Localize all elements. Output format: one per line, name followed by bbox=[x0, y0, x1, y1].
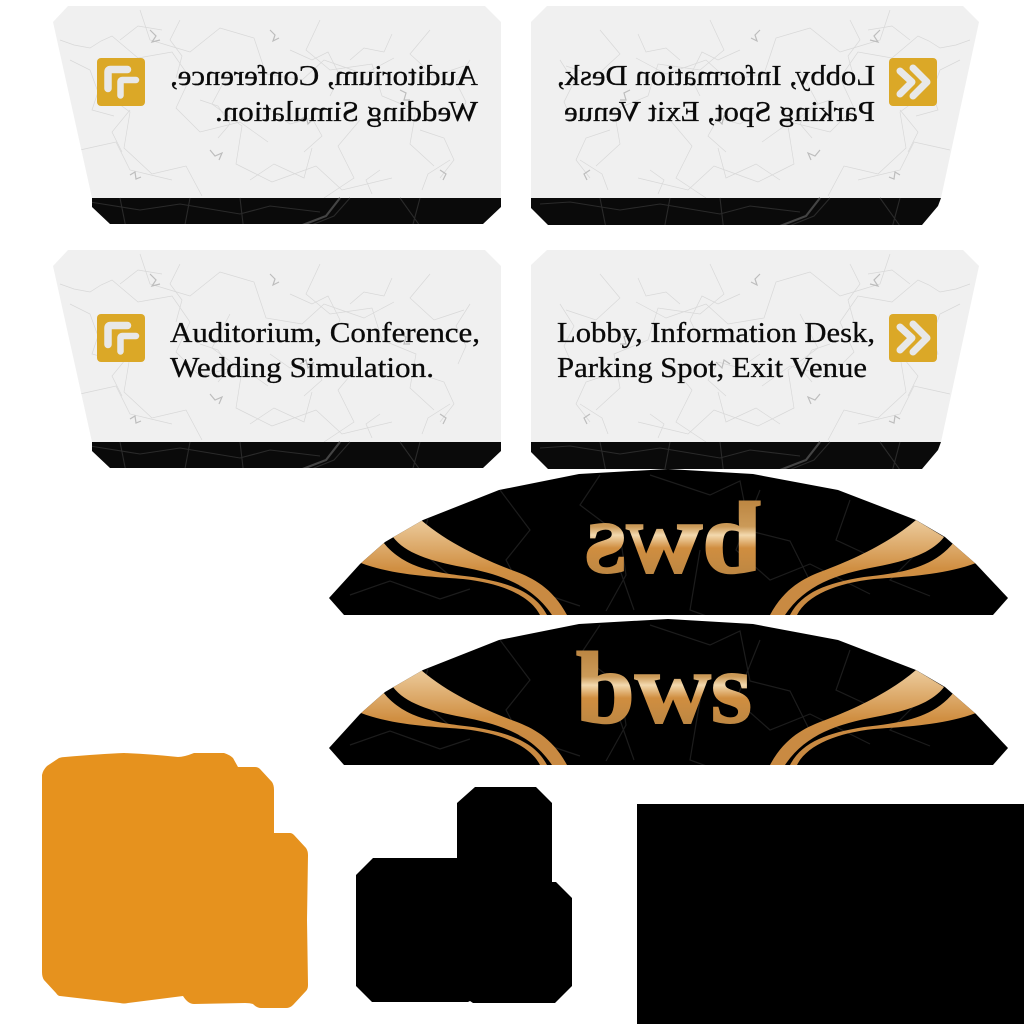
panel: mirrored lobby sign bbox=[525, 0, 985, 234]
icon: mirrored corner arrows bbox=[97, 58, 145, 106]
black rectangle bbox=[637, 804, 1024, 1024]
panel: mirrored logo dome bbox=[325, 465, 1015, 620]
text: lobby label: Parking Spot, Exit Venue bbox=[557, 352, 867, 384]
panel: mirrored auditorium sign bbox=[50, 0, 505, 234]
black silhouette shape bbox=[356, 787, 572, 1003]
logo: mirrored bws: bws bbox=[585, 482, 761, 595]
text: auditorium label: Wedding Simulation. bbox=[170, 352, 434, 384]
orange silhouette shape bbox=[42, 753, 308, 1008]
text: mirrored lobby label: Parking Spot, Exit Venue bbox=[564, 96, 875, 128]
text: auditorium label: Auditorium, Conference, bbox=[170, 317, 480, 349]
text: mirrored lobby label bbox=[557, 60, 875, 128]
text: mirrored auditorium label: Auditorium, Conference, bbox=[170, 60, 478, 92]
text: lobby label: Lobby, Information Desk, bbox=[557, 317, 875, 349]
panel: auditorium sign bbox=[50, 245, 505, 478]
text: mirrored auditorium label bbox=[170, 60, 478, 128]
logo: bws: bws bbox=[576, 632, 752, 745]
panel: logo dome bbox=[325, 615, 1015, 770]
text: mirrored lobby label: Lobby, Information Desk, bbox=[557, 60, 875, 92]
text: lobby label bbox=[557, 317, 875, 384]
icon: mirrored double chevron bbox=[889, 58, 937, 106]
icon: double chevron bbox=[889, 314, 937, 362]
text: mirrored auditorium label: Wedding Simulation. bbox=[215, 96, 478, 128]
text: auditorium label bbox=[170, 317, 480, 384]
icon: corner arrows bbox=[97, 314, 145, 362]
panel: lobby sign bbox=[525, 245, 985, 478]
